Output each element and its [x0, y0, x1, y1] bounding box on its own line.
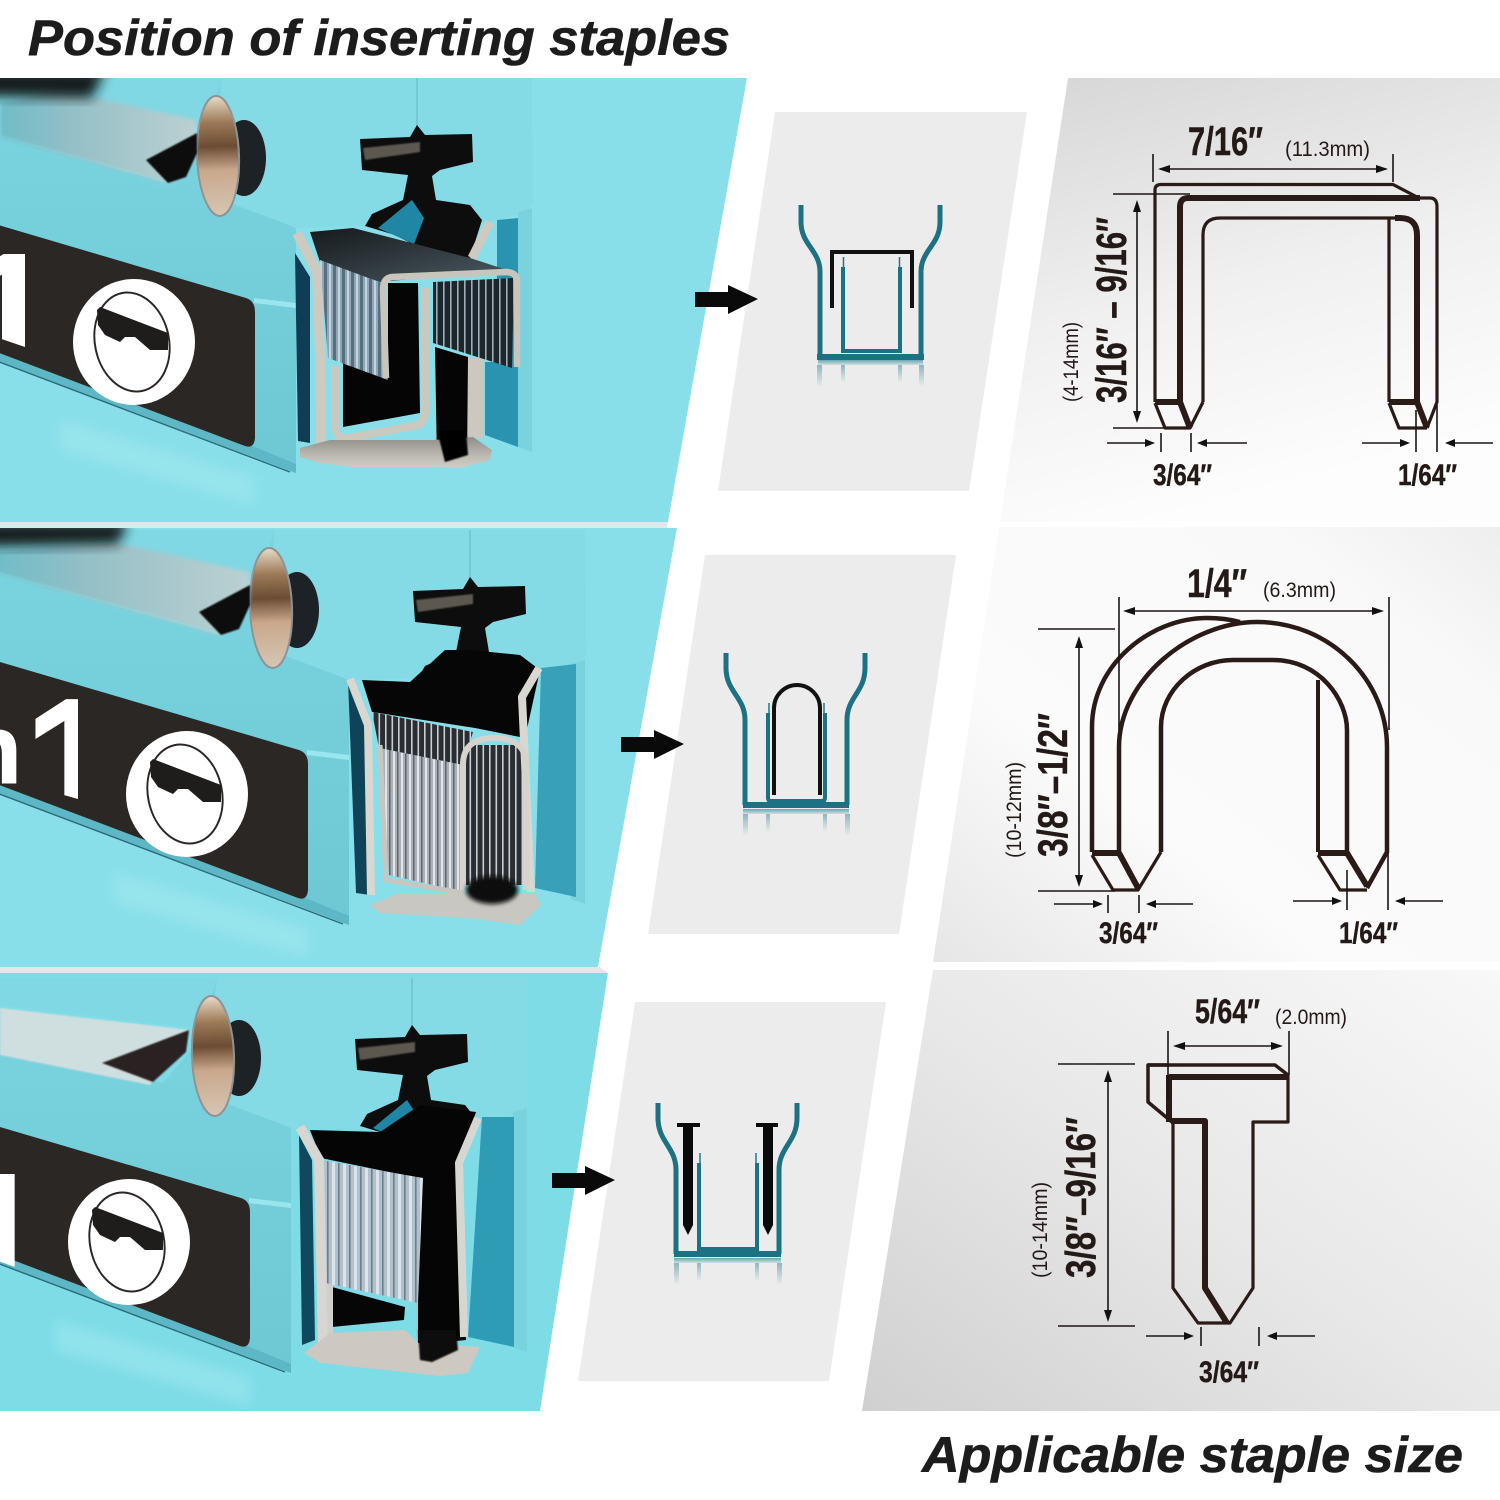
- divider band one: [0, 522, 668, 528]
- divider band two: [0, 967, 608, 973]
- panel: photo row one: [0, 70, 747, 522]
- flat crown staple drawing: [1155, 184, 1437, 428]
- arrow row two: [621, 730, 684, 759]
- staple magazine: flat crown staples: [295, 218, 518, 468]
- staple magazine: brad nails: [299, 1105, 514, 1376]
- channel reflection: [743, 809, 850, 836]
- panel: staple size row two: [933, 527, 1500, 962]
- length dimension: 3/8″–1/2″: [1029, 713, 1076, 857]
- panel: channel diagram row two: [648, 555, 956, 934]
- leg thickness dimensions: [1054, 852, 1443, 950]
- length dimension: 3/16″ – 9/16″: [1088, 217, 1136, 403]
- T nail drawing: [1148, 1065, 1288, 1323]
- brad nails in channel: [677, 1123, 778, 1235]
- length dimension: [1060, 194, 1190, 428]
- width dimension: 5/64″: [1195, 993, 1260, 1031]
- width dimension: 1/4″: [1187, 562, 1247, 606]
- length dimension: (10-14mm): [1029, 1182, 1052, 1278]
- arrow row one: [695, 285, 758, 314]
- heading: applicable staple size: Applicable staple size: [920, 1427, 1463, 1483]
- leg thickness dimensions: 1/64″: [1398, 459, 1457, 492]
- panel: staple size row three: [862, 970, 1500, 1411]
- length dimension: [1003, 629, 1115, 891]
- round crown staple drawing: [1092, 618, 1387, 890]
- length dimension: (10-12mm): [1003, 762, 1026, 858]
- arrow row three: [552, 1166, 615, 1195]
- flat staple in channel: [832, 252, 912, 308]
- channel rails: [801, 205, 940, 357]
- channel reflection: [674, 1258, 782, 1285]
- tip thickness dimension: 3/64″: [1199, 1356, 1259, 1389]
- length dimension: 3/8″–9/16″: [1057, 1117, 1104, 1278]
- leg thickness dimensions: [1107, 405, 1493, 492]
- channel rails: [726, 653, 865, 805]
- channel reflection: [817, 360, 924, 387]
- length dimension: [1029, 1064, 1135, 1326]
- leg thickness dimensions: 1/64″: [1339, 917, 1398, 950]
- tip thickness dimension: [1146, 1327, 1315, 1389]
- panel: channel diagram row three: [578, 1002, 886, 1381]
- width dimension: [1153, 120, 1393, 182]
- digits on black label: [0, 699, 78, 799]
- width dimension: 7/16″: [1188, 120, 1263, 164]
- panel: channel diagram row one: [718, 112, 1027, 491]
- channel rails: [658, 1103, 797, 1254]
- round staple in channel: [774, 685, 820, 795]
- staple magazine: round crown staples: [348, 650, 576, 925]
- width dimension: [1119, 562, 1389, 730]
- width dimension: [1168, 993, 1347, 1100]
- width dimension: (6.3mm): [1263, 579, 1336, 602]
- panel: staple size row one: [1000, 78, 1500, 522]
- panel: photo row two: [0, 522, 677, 967]
- length dimension: (4-14mm): [1060, 322, 1083, 402]
- width dimension: (11.3mm): [1285, 138, 1370, 161]
- leg thickness dimensions: 3/64″: [1153, 459, 1212, 492]
- width dimension: (2.0mm): [1275, 1006, 1347, 1029]
- leg thickness dimensions: 3/64″: [1099, 917, 1158, 950]
- heading: position of inserting staples: Position of inserting staples: [28, 10, 730, 66]
- panel: photo row three: [0, 973, 608, 1411]
- digits on black label: 1: [24, 663, 121, 858]
